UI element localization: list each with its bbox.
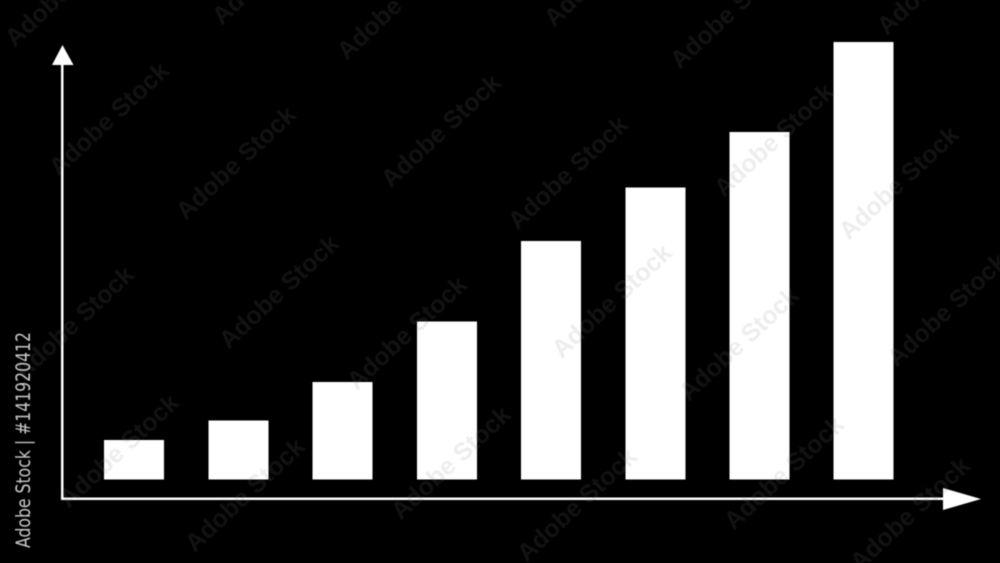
watermark pattern on background: Adobe Stock xyxy=(834,121,965,245)
watermark pattern on background: Adobe Stock xyxy=(171,101,302,225)
watermark pattern on background: Adobe Stock xyxy=(54,389,185,513)
y axis arrow xyxy=(52,45,74,500)
watermark pattern on background: Adobe Stock xyxy=(719,411,850,535)
watermark pattern on background: Adobe Stock xyxy=(9,261,140,385)
vertical stock id label: Adobe Stock | #141920412 xyxy=(12,332,35,548)
watermark pattern on background: Adobe Stock xyxy=(386,401,517,525)
watermark pattern on background: Adobe Stock xyxy=(547,239,678,363)
bar chart: eight rising white bars xyxy=(104,42,894,480)
watermark pattern on background: Adobe Stock xyxy=(214,230,345,354)
watermark pattern on background: Adobe Stock xyxy=(709,78,840,202)
watermark pattern on background: Adobe Stock xyxy=(342,271,473,395)
watermark pattern on background: Adobe Stock xyxy=(180,433,311,557)
watermark pattern on background: Adobe Stock xyxy=(376,69,507,193)
watermark pattern on background: Adobe Stock xyxy=(674,282,805,406)
x axis arrow xyxy=(61,488,981,510)
watermark pattern on background: Adobe Stock xyxy=(44,57,175,181)
watermark pattern on background: Adobe Stock xyxy=(503,111,634,235)
